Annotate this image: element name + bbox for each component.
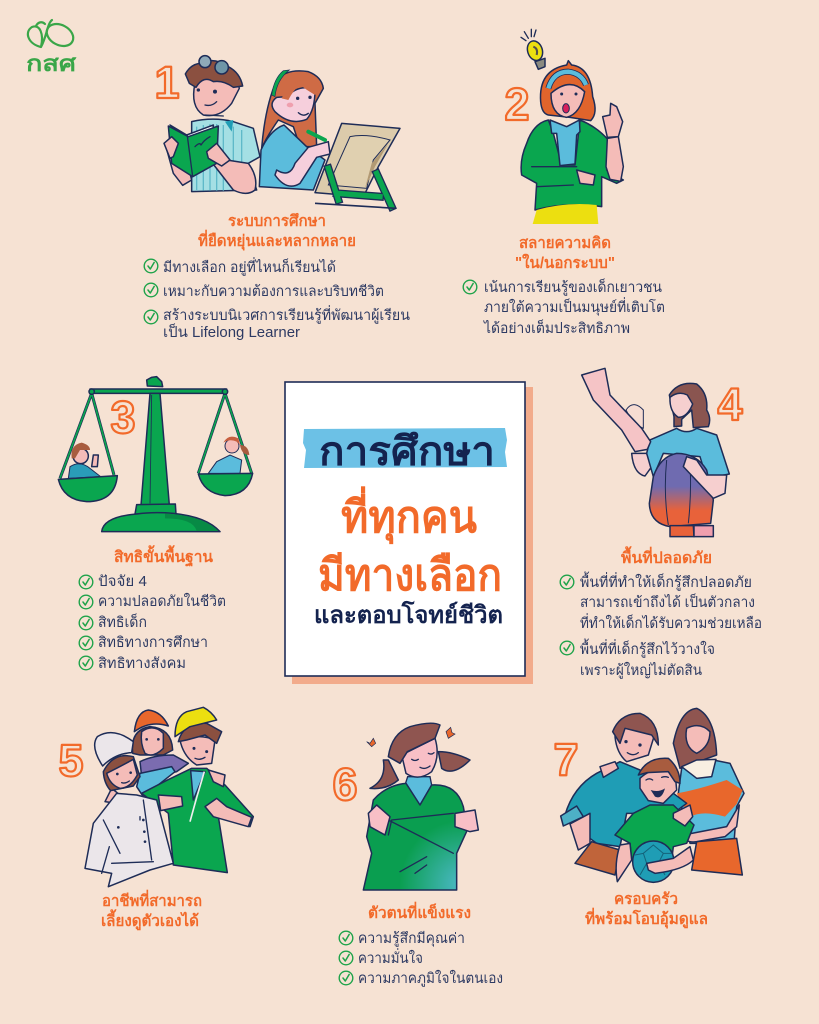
heading: เลี้ยงดูตัวเองได้ xyxy=(101,909,199,932)
heading: อาชีพที่สามารถ xyxy=(102,889,202,910)
panel 7: caring family xyxy=(553,708,744,930)
title: และตอบโจทย์ชีวิต xyxy=(314,600,503,629)
illustration: family with ball xyxy=(561,708,744,882)
heading: ตัวตนที่แข็งแรง xyxy=(368,901,471,922)
checklist: ได้อย่างเต็มประสิทธิภาพ xyxy=(483,318,630,337)
heading: ครอบครัว xyxy=(614,891,678,908)
checklist: ความปลอดภัยในชีวิต xyxy=(98,592,226,610)
checklist: เน้นการเรียนรู้ของเด็กเยาวชน xyxy=(484,277,662,296)
number 4: 4 xyxy=(717,379,743,430)
logo: กสศ xyxy=(26,51,77,76)
checklist: สิทธิเด็ก xyxy=(98,612,147,631)
checklist: พื้นที่ที่ทำให้เด็กรู้สึกปลอดภัย xyxy=(580,571,752,591)
panel 2: breaking in/out of system thinking xyxy=(463,29,665,337)
panel 1: flexible education system xyxy=(144,56,410,341)
heading xyxy=(515,234,615,272)
panel 6: strong self xyxy=(332,723,503,987)
heading: สิทธิขั้นพื้นฐาน xyxy=(114,545,213,567)
item: เหมาะกับความต้องการและบริบทชีวิต xyxy=(163,283,384,300)
item: สร้างระบบนิเวศการเรียนรู้ที่พัฒนาผู้เรียน xyxy=(163,305,410,324)
heading: ที่พร้อมโอบอุ้มดูแล xyxy=(585,907,708,930)
highlight xyxy=(303,428,507,468)
checklist: สิทธิทางสังคม xyxy=(98,656,186,672)
heading: พื้นที่ปลอดภัย xyxy=(621,546,712,567)
center title card xyxy=(285,382,533,684)
heading xyxy=(101,889,202,932)
illustration: woman with light bulb idea xyxy=(521,29,623,224)
illustration: chef, worker and engineer xyxy=(85,707,253,887)
heading xyxy=(585,891,708,930)
number 1: 1 xyxy=(154,57,180,108)
number 7: 7 xyxy=(553,734,579,785)
title: ที่ทุกคน xyxy=(341,486,477,545)
number 6: 6 xyxy=(332,759,358,810)
title: มีทางเลือก xyxy=(318,551,502,600)
illustration: girl hugging herself xyxy=(363,723,478,890)
checklist xyxy=(339,930,503,987)
checklist: ภายใต้ความเป็นมนุษย์ที่เติบโต xyxy=(484,297,665,316)
checklist: ความรู้สึกมีคุณค่า xyxy=(358,930,465,947)
heading: ที่ยืดหยุ่นและหลากหลาย xyxy=(198,229,356,251)
checklist: ปัจจัย 4 xyxy=(98,574,147,590)
checklist: พื้นที่ที่เด็กรู้สึกไว้วางใจ xyxy=(580,638,715,658)
panel 4: safe space xyxy=(560,368,762,679)
item: มีทางเลือก อยู่ที่ไหนก็เรียนได้ xyxy=(163,257,336,276)
checklist: สามารถเข้าถึงได้ เป็นตัวกลาง xyxy=(580,592,755,611)
heading: สลายความคิด xyxy=(519,234,611,252)
checklist xyxy=(560,571,762,679)
checklist xyxy=(144,257,410,341)
checklist: เพราะผู้ใหญ่ไม่ตัดสิน xyxy=(580,661,702,679)
panel 5: self-supporting careers xyxy=(58,707,253,932)
checklist: สิทธิทางการศึกษา xyxy=(98,635,208,651)
checklist xyxy=(79,574,226,672)
number 3: 3 xyxy=(110,392,136,443)
illustration: seated girl with adult hand xyxy=(582,368,729,537)
checklist xyxy=(463,277,665,337)
heading: "ใน/นอกระบบ" xyxy=(515,253,615,272)
panel 3: basic rights xyxy=(58,377,253,672)
checklist: ความมั่นใจ xyxy=(358,948,423,967)
logo xyxy=(26,20,77,76)
item: เป็น Lifelong Learner xyxy=(163,322,300,341)
illustration: balance scale with children xyxy=(58,377,253,532)
title xyxy=(314,430,503,629)
checklist: ความภาคภูมิใจในตนเอง xyxy=(358,969,503,987)
checklist: ที่ทำให้เด็กได้รับความช่วยเหลือ xyxy=(580,613,762,632)
number 5: 5 xyxy=(58,735,84,786)
title: การศึกษา xyxy=(319,430,495,474)
heading xyxy=(198,212,356,251)
item xyxy=(144,305,410,341)
number 2: 2 xyxy=(504,79,530,130)
heading: ระบบการศึกษา xyxy=(228,212,326,230)
illustration: boy reading and girl painting xyxy=(164,56,400,208)
